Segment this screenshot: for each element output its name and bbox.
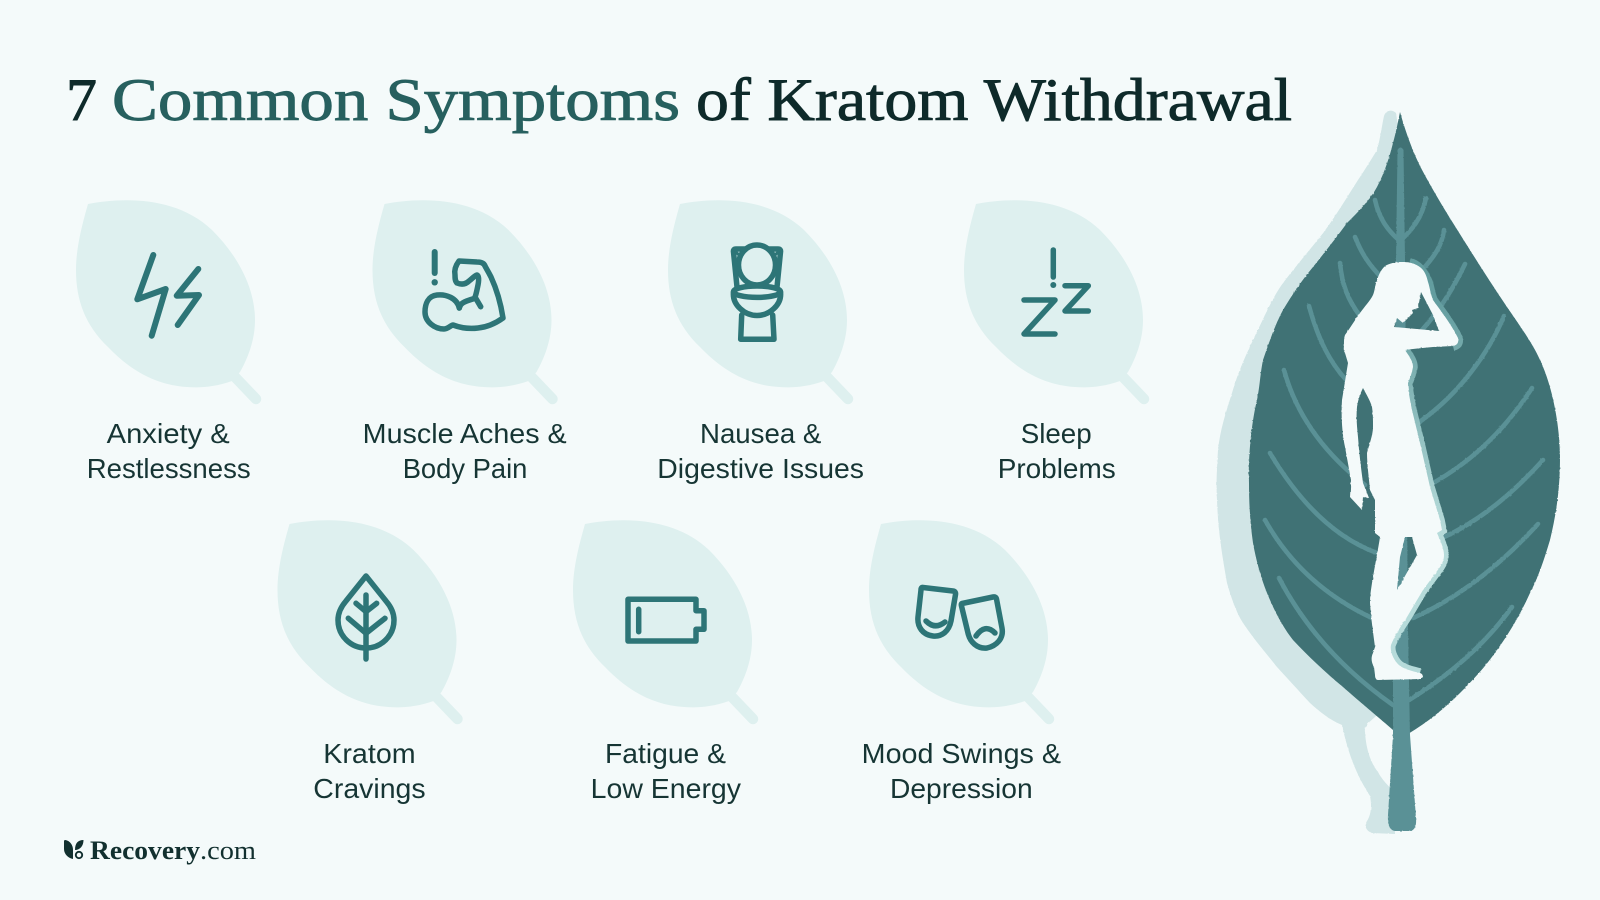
logo: Recovery.com: [64, 836, 256, 865]
leaf background: [76, 200, 256, 399]
label: Digestive Issues: [657, 453, 864, 484]
figure edge highlight: [1391, 263, 1458, 673]
leaf background: [668, 200, 848, 399]
label: Muscle Aches &: [363, 418, 567, 449]
title: 7: [66, 67, 97, 133]
label: [862, 738, 1061, 804]
symptom: nausea: [657, 200, 864, 484]
icon: flexed arm with exclamation mark: [425, 252, 503, 329]
icon: leaf: [338, 576, 394, 659]
symptom: muscle aches: [363, 200, 567, 484]
leaf background: [869, 520, 1049, 719]
logo wordmark: .com: [200, 836, 256, 865]
label: [87, 418, 251, 484]
label: Fatigue &: [605, 738, 726, 769]
logo mark: [64, 840, 84, 859]
label: Cravings: [313, 773, 426, 804]
leaf background: [964, 200, 1144, 399]
woman silhouette: [1342, 262, 1458, 680]
label: [363, 418, 567, 484]
leaf background: [372, 200, 552, 399]
label: Kratom: [323, 738, 416, 769]
title: Common Symptoms: [112, 67, 680, 133]
title: of Kratom Withdrawal: [696, 67, 1292, 133]
veins and midrib: [1265, 148, 1543, 831]
icon: exclamation and ZZ: [1024, 250, 1088, 334]
symptom: mood swings: [862, 520, 1061, 804]
icon: lightning bolts: [137, 255, 199, 336]
main leaf: [1249, 112, 1560, 734]
label: [313, 738, 426, 804]
label: Nausea &: [700, 418, 822, 449]
logo wordmark: [90, 836, 256, 865]
label: Mood Swings &: [862, 738, 1061, 769]
illustration: leaf with silhouette: [1217, 111, 1560, 834]
logo wordmark: Recovery: [90, 836, 200, 865]
label: Low Energy: [591, 773, 741, 804]
label: Depression: [890, 773, 1033, 804]
label: [657, 418, 864, 484]
label: [998, 418, 1116, 484]
label: Sleep: [1021, 418, 1092, 449]
symptom: kratom cravings: [278, 520, 458, 804]
leaf background: [278, 520, 458, 719]
label: Restlessness: [87, 453, 251, 484]
symptom: fatigue: [573, 520, 753, 804]
symptom: sleep problems: [964, 200, 1144, 484]
icon: low battery: [628, 599, 704, 641]
symptom: anxiety and restlessness: [76, 200, 256, 484]
icon: toilet: [733, 245, 781, 339]
label: Body Pain: [403, 453, 527, 484]
leaf background: [573, 520, 753, 719]
label: Anxiety &: [107, 418, 230, 449]
title: [66, 67, 1292, 133]
leaf shadow: [1217, 111, 1400, 834]
icon: theatre masks: [918, 587, 1002, 648]
label: Problems: [998, 453, 1116, 484]
label: [591, 738, 741, 804]
